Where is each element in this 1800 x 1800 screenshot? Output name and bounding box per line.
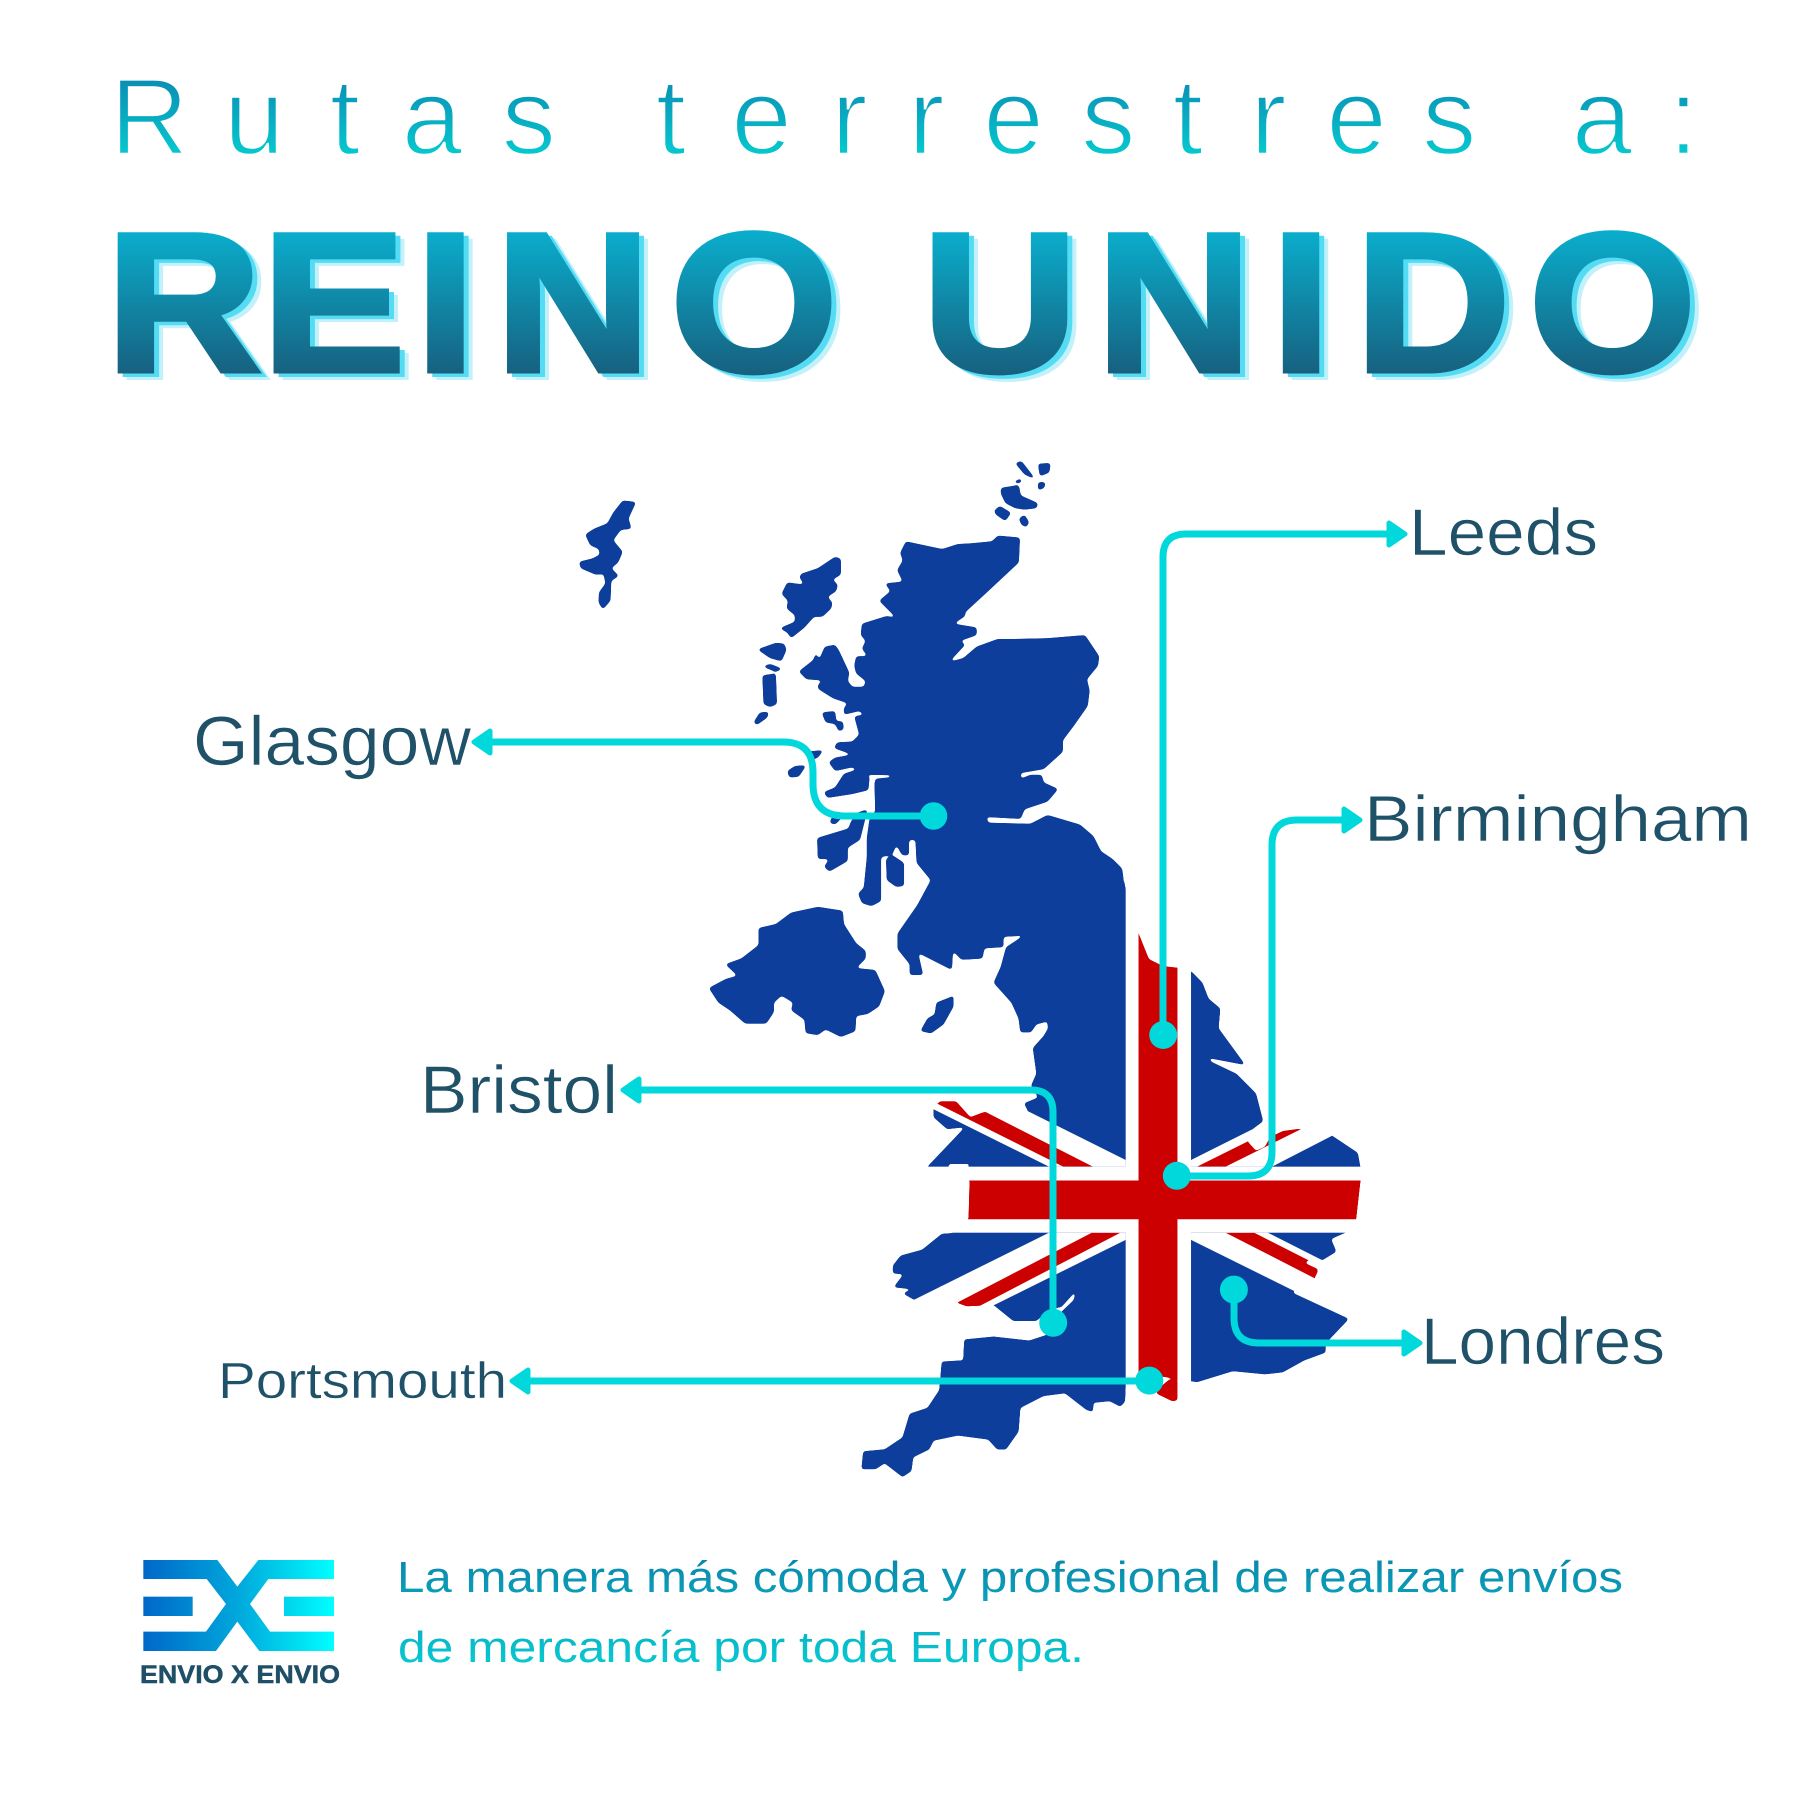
label: Bristol: Bristol bbox=[420, 1052, 618, 1128]
tagline bbox=[397, 1553, 1623, 1672]
Isle of Man bbox=[920, 996, 954, 1033]
title: REINO UNIDO: REINO UNIDO bbox=[115, 198, 1705, 420]
route: Portsmouth bbox=[218, 1352, 1163, 1409]
title: REINO UNIDO: REINO UNIDO bbox=[106, 192, 1696, 413]
route: Glasgow bbox=[193, 702, 947, 830]
label: Glasgow: Glasgow bbox=[193, 702, 471, 780]
Orkney bbox=[994, 461, 1051, 527]
logo mark bbox=[143, 1560, 334, 1651]
logo wordmark: ENVIO X ENVIO bbox=[140, 1661, 340, 1689]
route: Birmingham bbox=[1163, 782, 1752, 1190]
route: Leeds bbox=[1149, 495, 1598, 1049]
Scottish mainland bbox=[799, 536, 1126, 975]
logo: Envio X Envio bbox=[140, 1560, 340, 1689]
map of the United Kingdom bbox=[579, 461, 1411, 1509]
map: Scotland, Northern Ireland and islands bbox=[579, 461, 1126, 1037]
label: Birmingham: Birmingham bbox=[1364, 782, 1752, 855]
title: REINO UNIDO: REINO UNIDO bbox=[111, 195, 1701, 417]
label: Londres: Londres bbox=[1421, 1304, 1665, 1378]
Shetland bbox=[579, 500, 636, 610]
subtitle: Rutas terrestres a:: Rutas terrestres a: bbox=[110, 56, 1699, 178]
Northern Ireland bbox=[709, 907, 885, 1037]
route: Londres bbox=[1220, 1276, 1665, 1378]
Hebrides bbox=[754, 557, 904, 887]
Union flag masked to the land bbox=[862, 881, 1360, 1476]
tagline: La manera más cómoda y profesional de realizar envíos bbox=[397, 1553, 1623, 1602]
map: England and Wales with Union flag bbox=[862, 881, 1360, 1476]
label: Portsmouth: Portsmouth bbox=[218, 1352, 507, 1409]
route: Bristol bbox=[420, 1052, 1067, 1337]
tagline: de mercancía por toda Europa. bbox=[398, 1623, 1084, 1672]
label: Leeds: Leeds bbox=[1409, 495, 1598, 569]
